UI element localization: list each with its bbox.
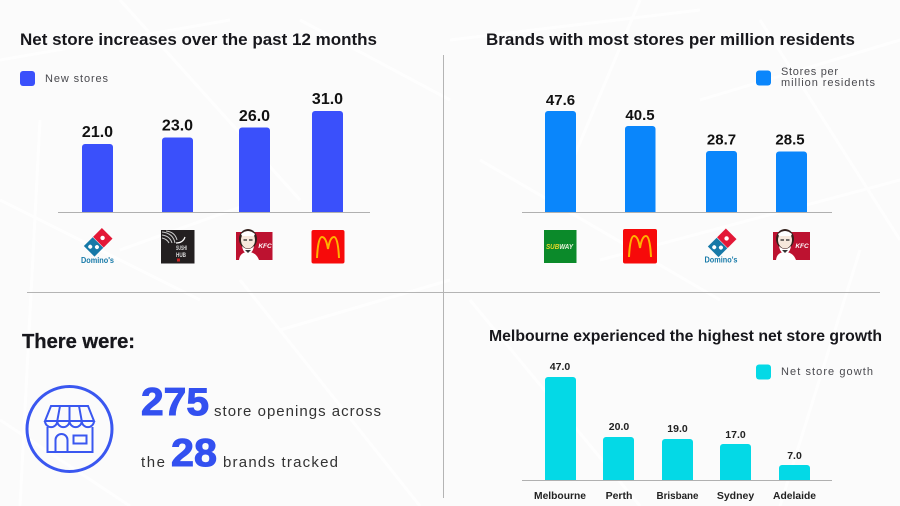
bar chart: net store growth: Melbourne (534, 490, 586, 502)
bar chart: net store growth: 7.0 (787, 450, 802, 462)
logo: Sushi Hub: HUB (176, 252, 186, 259)
logo: Domino's: Domino's (81, 256, 115, 265)
legend: new stores (20, 71, 108, 86)
bar chart: new stores (58, 91, 370, 213)
legend: net store growth: Net store gowth (781, 366, 873, 378)
logo: Subway: SUBWAY (546, 242, 574, 251)
stat: 28 brands tracked: brands tracked (223, 454, 338, 471)
bar chart: net store growth (522, 361, 832, 502)
stat: 275 store openings: 275 (141, 381, 209, 424)
heading: stores per million: Brands with most stores per million residents (486, 30, 855, 49)
legend: stores per million residents: million residents (781, 77, 876, 89)
bar chart: new stores: 21.0 (82, 124, 113, 141)
legend: stores per million residents: Stores per (781, 66, 838, 78)
heading: net store growth: Melbourne experienced the highest net store growth (489, 328, 882, 345)
bar chart: new stores: 26.0 (239, 108, 270, 125)
bar chart: net store growth: 47.0 (550, 361, 570, 373)
icon: store (27, 386, 112, 472)
panel: stores per million residents (486, 30, 876, 264)
panel: net store growth (489, 328, 882, 502)
legend: stores per million residents (756, 66, 876, 89)
bar chart: stores per million: 40.5 (625, 107, 655, 124)
stat: 275 store openings (141, 381, 381, 424)
panel: net store increases (20, 30, 377, 265)
bar chart: stores per million: 47.6 (546, 92, 575, 109)
heading: net store increases: Net store increases over the past 12 months (20, 30, 377, 49)
bar chart: net store growth: 20.0 (609, 421, 629, 433)
bar chart: new stores: 23.0 (162, 118, 193, 134)
bar chart: net store growth: Perth (606, 490, 632, 502)
logo: McDonald's (312, 230, 344, 264)
bar chart: net store growth: 19.0 (667, 423, 688, 435)
bar chart: net store growth: Sydney (717, 490, 754, 502)
logo: Sushi Hub (161, 230, 194, 264)
logo: KFC (773, 229, 810, 260)
bar chart: net store growth: 17.0 (725, 429, 746, 441)
logo: KFC: KFC (258, 243, 272, 250)
stat: 275 store openings: store openings across (214, 403, 381, 420)
stat: 28 brands tracked (141, 432, 338, 475)
legend: net store growth (756, 364, 873, 380)
bar chart: net store growth: Brisbane (656, 490, 699, 502)
bar chart: stores per million: 28.7 (707, 132, 736, 148)
logo: KFC (236, 229, 272, 260)
legend: new stores: New stores (45, 73, 108, 85)
logo: Subway (544, 230, 576, 263)
stat: 28 brands tracked: the (141, 454, 165, 471)
stat: 28 brands tracked: 28 (171, 432, 217, 475)
panel: there were (22, 331, 381, 475)
bar chart: stores per million: 28.5 (775, 132, 805, 148)
logo: Domino's (704, 229, 738, 264)
logo: Domino's: Domino's (704, 256, 738, 264)
logo: KFC: KFC (795, 243, 809, 250)
bar chart: stores per million (522, 92, 832, 213)
logo: McDonald's (623, 229, 657, 264)
bar chart: net store growth: Adelaide (773, 490, 816, 502)
logo: Sushi Hub: SUSHI (176, 245, 187, 252)
logo: Domino's (81, 228, 115, 265)
heading: there were: There were: (22, 331, 135, 353)
bar chart: new stores: 31.0 (312, 91, 343, 108)
